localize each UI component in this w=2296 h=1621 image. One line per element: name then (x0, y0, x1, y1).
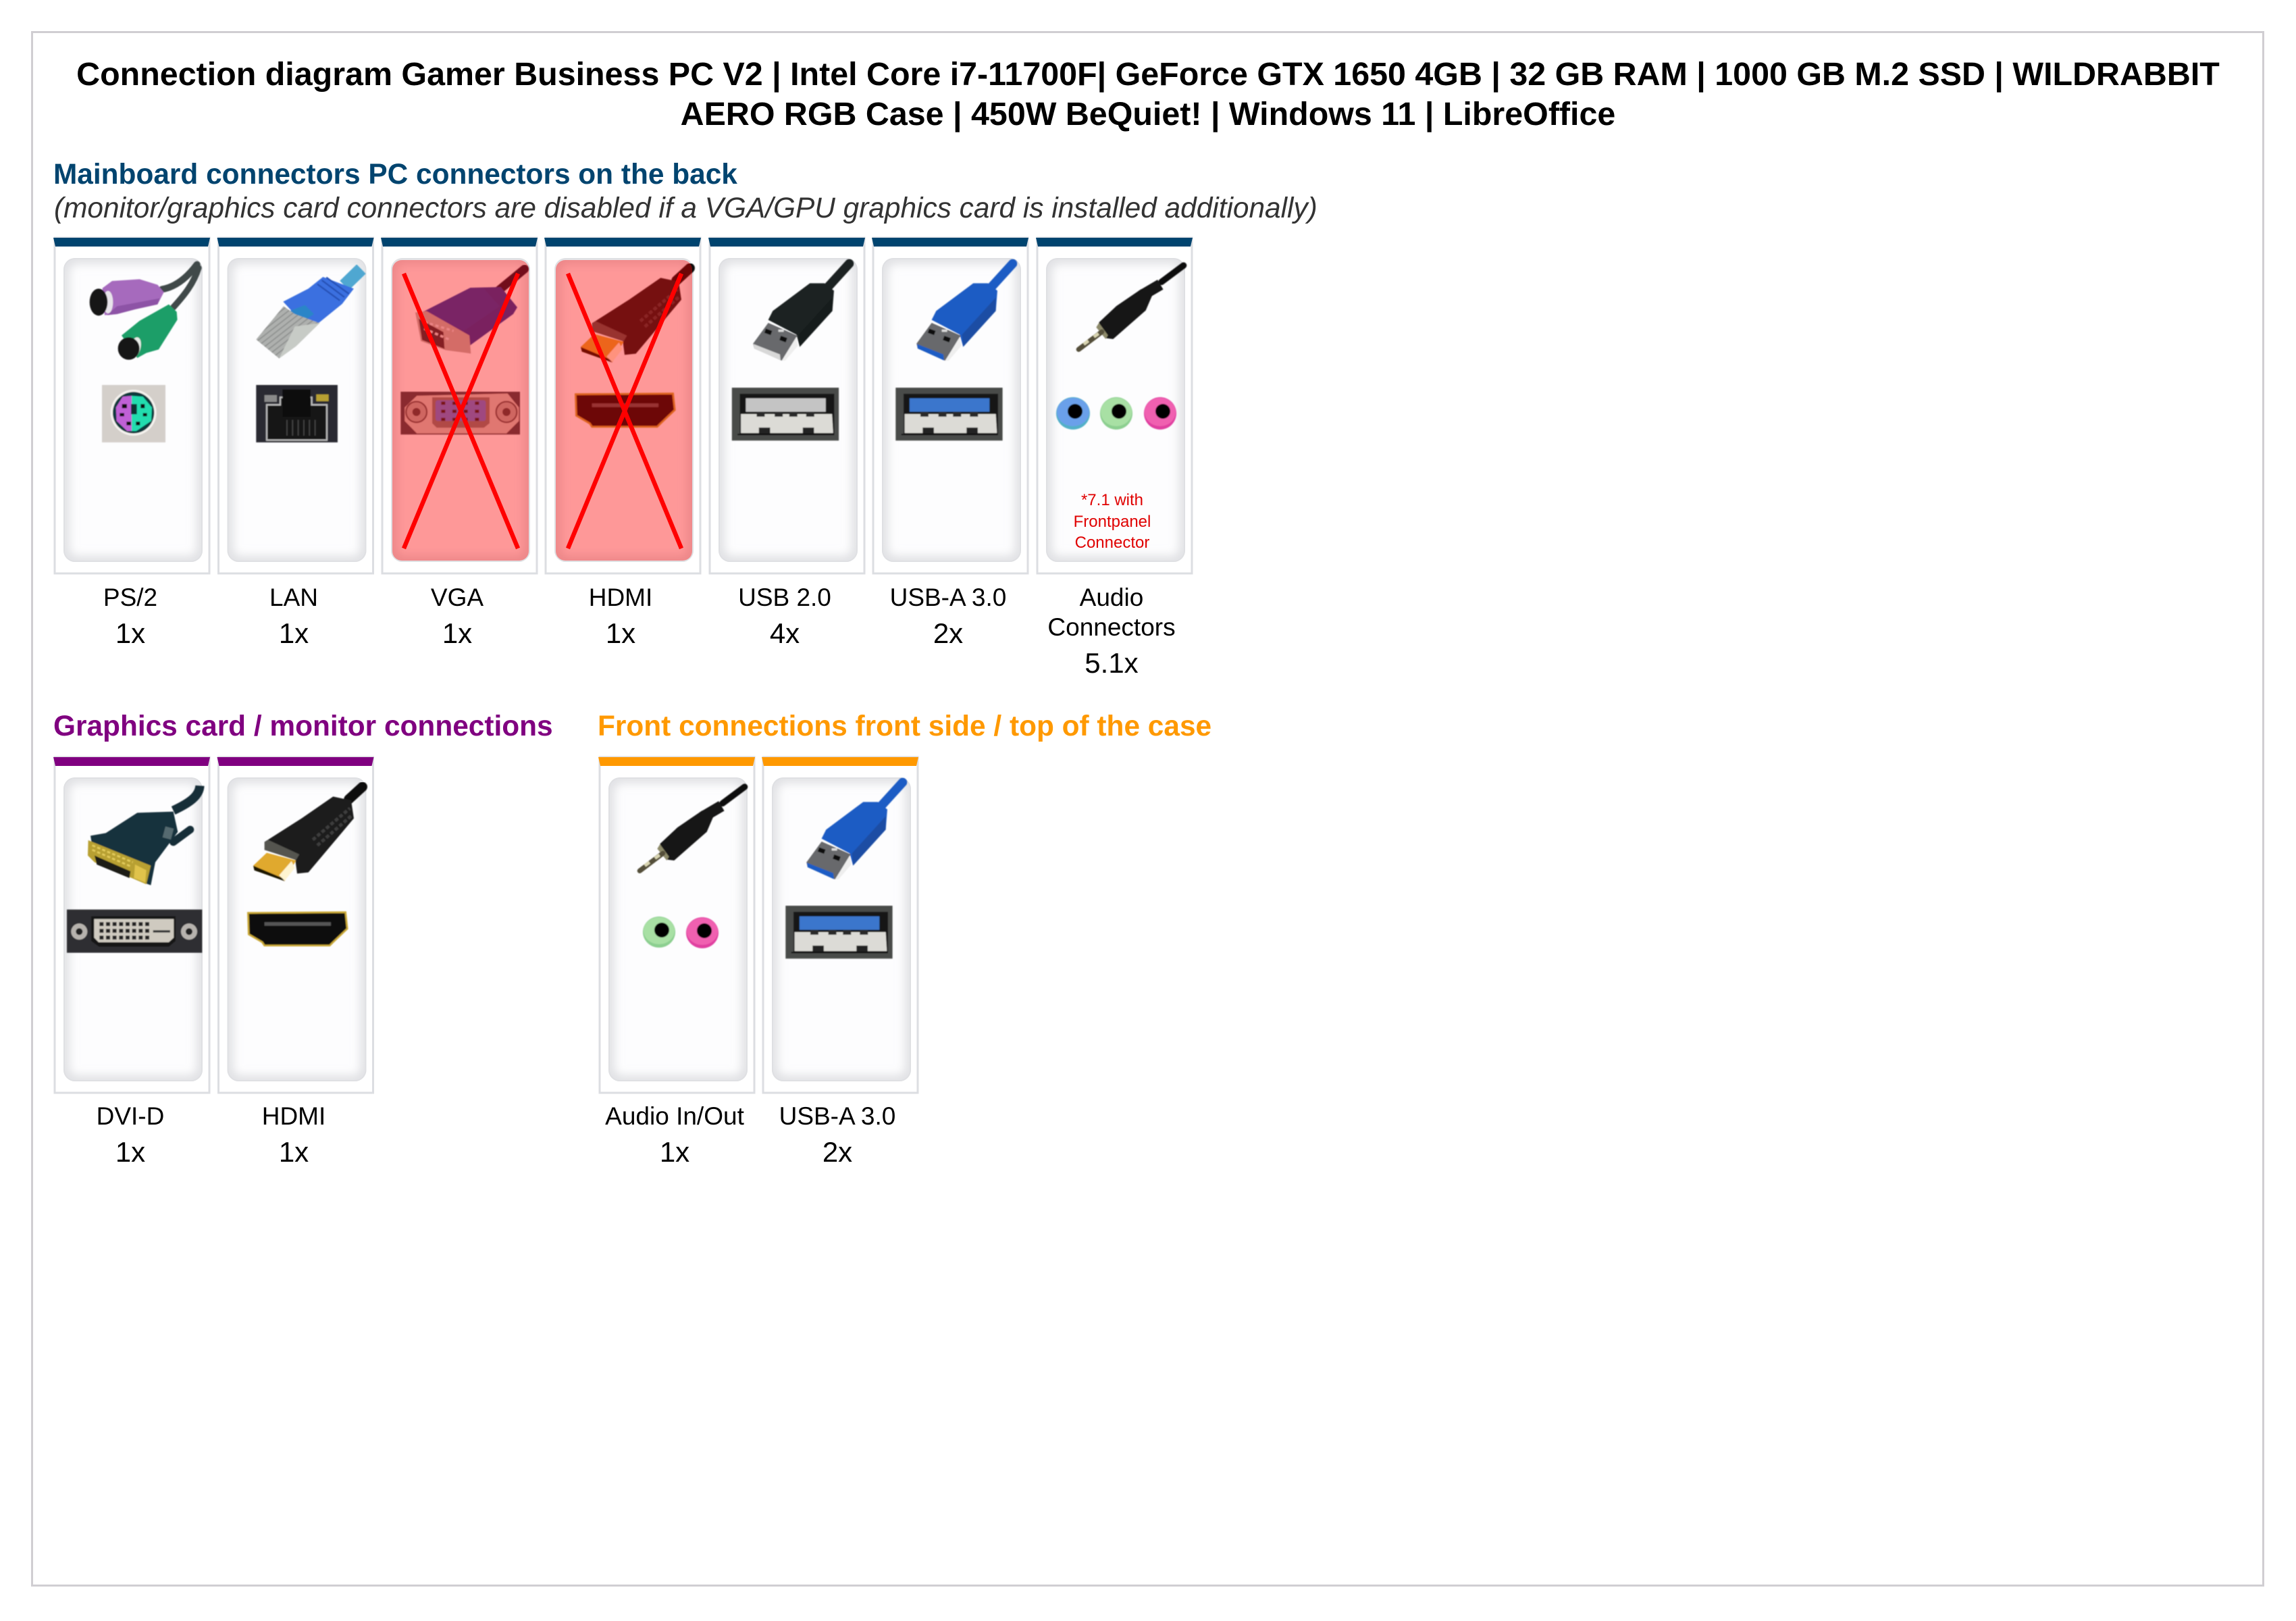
icon: HDMI port (248, 912, 347, 946)
label: audio in/out: Audio In/Out (605, 1102, 745, 1130)
label: HDMI: HDMI (262, 1102, 325, 1130)
card: DVI-D (53, 757, 210, 1093)
icon: audio plug (640, 787, 745, 871)
label: PS/2 (103, 584, 157, 649)
label: USB-A 3.0 (890, 584, 1006, 649)
label: USB 2.0: USB 2.0 (738, 584, 831, 611)
label: LAN: 1x (279, 617, 309, 649)
icon: USB 3.0 plug (916, 263, 1013, 361)
icon: VGA port (400, 392, 520, 434)
card: audio connectors (1036, 238, 1193, 573)
icon: HDMI plug (253, 787, 363, 881)
icon: pink jack (686, 917, 719, 948)
label: HDMI (589, 584, 652, 649)
label: audio connectors: Connectors (1047, 613, 1176, 641)
label: HDMI: HDMI (589, 584, 652, 611)
icon: LAN plug (256, 269, 361, 359)
note: 7.1 with frontpanel (1074, 491, 1151, 552)
heading: graphics card: Graphics card / monitor connections (53, 710, 553, 742)
card: PS/2 (53, 238, 210, 573)
card: USB 2.0 (708, 238, 865, 573)
label: audio connectors (1047, 584, 1176, 679)
icon: green jack (643, 917, 675, 948)
label: VGA: VGA (431, 584, 484, 611)
icon: pink jack (1144, 397, 1176, 430)
icon: HDMI port (575, 394, 675, 427)
icon: USB 2.0 port (732, 388, 839, 440)
label: PS/2: PS/2 (103, 584, 157, 611)
icon: PS/2 plug (90, 265, 199, 360)
icon: USB 3.0 port (785, 906, 893, 958)
card: VGA disabled (381, 238, 538, 573)
icon: LAN port (256, 385, 338, 442)
red cross (568, 274, 681, 548)
icon: blue jack (1056, 397, 1090, 430)
label: USB 2.0 (738, 584, 831, 649)
label: USB 2.0: 4x (770, 617, 800, 649)
label: VGA: 1x (442, 617, 472, 649)
note: disabled connectors: (monitor/graphics card connectors are disabled if a VGA/GPU graphics card is installed additionally) (54, 192, 1317, 224)
label: USB-A 3.0 front: 2x (823, 1136, 852, 1168)
label: audio connectors: Audio (1080, 584, 1143, 611)
red overlay (556, 260, 692, 561)
icon: DVI port (67, 910, 202, 953)
note: 7.1 with frontpanel: Connector (1075, 534, 1149, 552)
icon: green jack (1100, 397, 1132, 430)
card: HDMI disabled (544, 238, 701, 573)
heading: front connections: Front connections front side / top of the case (598, 710, 1211, 742)
icon: USB 3.0 plug (806, 782, 903, 879)
label: VGA (431, 584, 484, 649)
card: USB-A 3.0 (872, 238, 1028, 573)
label: audio in/out (605, 1102, 745, 1168)
label: HDMI: 1x (279, 1136, 309, 1168)
note: 7.1 with frontpanel: *7.1 with (1081, 491, 1143, 509)
icon: USB 2.0 plug (753, 263, 850, 361)
icon: VGA plug (415, 269, 525, 353)
card: HDMI (217, 757, 374, 1093)
label: USB-A 3.0: 2x (933, 617, 963, 649)
label: USB-A 3.0 front (779, 1102, 895, 1168)
icon: DVI plug (88, 786, 200, 885)
icon: PS/2 port (102, 385, 165, 442)
card: USB-A 3.0 front (762, 757, 918, 1093)
label: PS/2: 1x (115, 617, 145, 649)
icon: HDMI plug (581, 268, 690, 363)
label: audio connectors: 5.1x (1085, 647, 1139, 679)
label: DVI-D (97, 1102, 164, 1168)
red overlay (392, 260, 529, 561)
label: USB-A 3.0: USB-A 3.0 (890, 584, 1006, 611)
label: LAN: LAN (269, 584, 318, 611)
red cross (404, 274, 518, 548)
title: Connection diagram Gamer Business PC V2 | Intel Core i7-11700F| GeForce GTX 1650 4GB | 32 GB RAM | 1000 GB M.2 SSD | WILDRABBIT (76, 56, 2220, 93)
label: DVI-D: DVI-D (97, 1102, 164, 1130)
label: USB-A 3.0 front: USB-A 3.0 (779, 1102, 895, 1130)
icon: USB 3.0 port (895, 388, 1003, 440)
icon: audio plug (1078, 265, 1184, 349)
label: audio in/out: 1x (660, 1136, 689, 1168)
label: LAN (269, 584, 318, 649)
label: DVI-D: 1x (115, 1136, 145, 1168)
title (76, 56, 2220, 132)
title: AERO RGB Case | 450W BeQuiet! | Windows 11 | LibreOffice (681, 96, 1615, 132)
card: LAN (217, 238, 374, 573)
note: 7.1 with frontpanel: Frontpanel (1074, 513, 1151, 531)
heading: mainboard connectors: Mainboard connectors PC connectors on the back (53, 158, 737, 190)
label: HDMI: 1x (606, 617, 635, 649)
card: audio in/out (598, 757, 755, 1093)
label: HDMI (262, 1102, 325, 1168)
